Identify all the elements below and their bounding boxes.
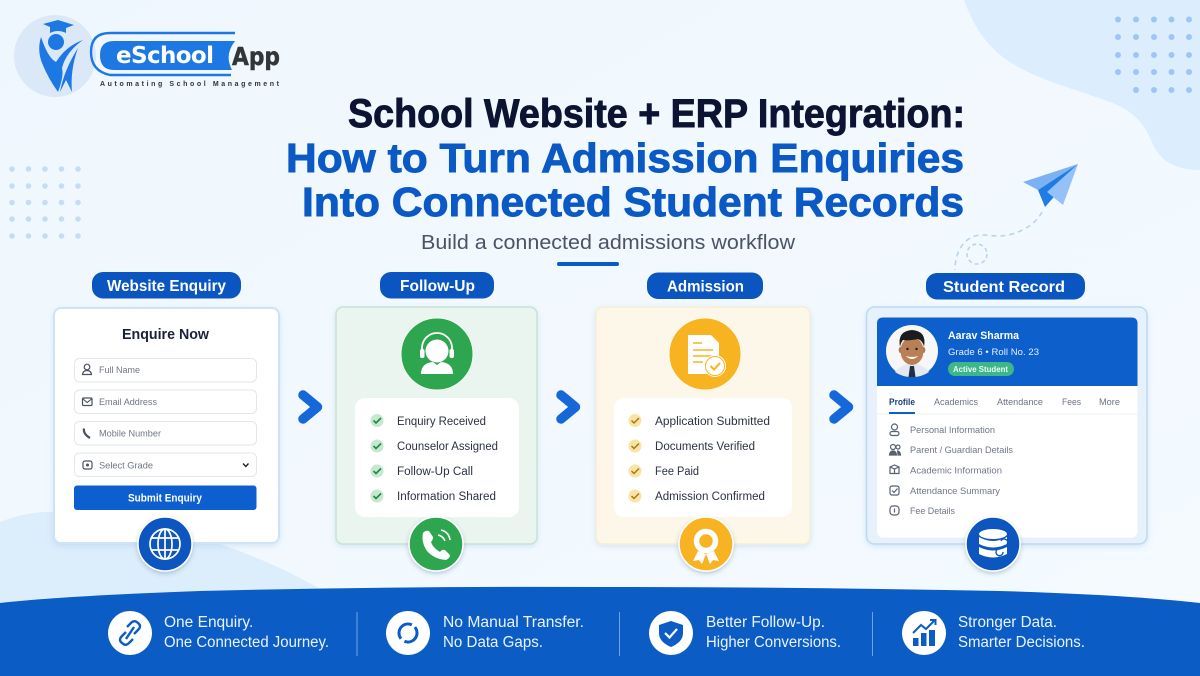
checklist: admission: Application Submitted [655, 416, 770, 428]
checklist: follow-up: Follow-Up Call [397, 466, 473, 478]
arrow 1 [303, 395, 318, 419]
step 4 pill: Student Record: Student Record [943, 279, 1065, 296]
footer band [0, 587, 1200, 676]
title: Into Connected Student Records [302, 179, 964, 225]
profile header: Grade 6 • Roll No. 23 [948, 347, 1039, 358]
benefit: stronger data: Smarter Decisions. [958, 634, 1085, 651]
benefit: connected journey: One Connected Journey. [164, 634, 329, 651]
field: full name [74, 358, 256, 382]
arrow 3 [834, 395, 848, 419]
checklist: follow-up [355, 398, 519, 517]
tabs [877, 397, 1138, 414]
step 3 pill: Admission: Admission [667, 278, 744, 296]
record list: Attendance Summary [910, 486, 1000, 497]
benefit: better follow-up: Better Follow-Up. [706, 614, 825, 631]
title [286, 92, 965, 225]
checklist: follow-up: Enquiry Received [397, 416, 486, 428]
icon: globe [138, 517, 192, 571]
checklist: follow-up: Information Shared [397, 491, 496, 503]
record list: Fee Details [910, 506, 955, 517]
field: full name: Full Name [99, 365, 140, 376]
title: How to Turn Admission Enquiries [286, 135, 964, 181]
field: email address: Email Address [99, 397, 157, 408]
checklist: admission: Documents Verified [655, 441, 755, 453]
tabs: Profile [889, 397, 915, 408]
status badge: Active Student [953, 364, 1008, 374]
benefit: connected journey [108, 611, 329, 655]
form heading: Enquire Now [122, 326, 209, 343]
panel: admission [596, 307, 810, 544]
subtitle: Build a connected admissions workflow [421, 232, 796, 254]
benefit: stronger data: Stronger Data. [958, 614, 1057, 631]
icon: document [669, 318, 741, 390]
arrow 2 [561, 395, 576, 419]
benefit: connected journey: One Enquiry. [164, 614, 253, 631]
step 1 pill: Website Enquiry [92, 272, 241, 298]
subtitle underline [557, 262, 619, 266]
profile header [877, 318, 1138, 386]
benefit: better follow-up: Higher Conversions. [706, 634, 841, 651]
logo emblem [14, 15, 96, 97]
benefit: no manual transfer [386, 611, 584, 655]
record list: Personal Information [910, 425, 995, 436]
tabs: More [1099, 397, 1120, 408]
profile header: Aarav Sharma [948, 330, 1020, 342]
logo wordmark [91, 33, 280, 88]
record list: Parent / Guardian Details [910, 445, 1013, 456]
panel: follow-up [336, 307, 537, 544]
title: School Website + ERP Integration: [348, 92, 965, 136]
step 4 pill: Student Record [926, 273, 1085, 300]
tabs: Fees [1062, 397, 1081, 408]
benefit: no manual transfer: No Manual Transfer. [443, 614, 584, 631]
submit button: Submit Enquiry [128, 492, 203, 504]
benefit: stronger data [902, 611, 1085, 655]
icon: database [966, 517, 1020, 571]
checklist: admission [614, 398, 792, 517]
logo wordmark: App [232, 42, 280, 71]
field: select grade [74, 453, 256, 476]
step 2 pill: Follow-Up: Follow-Up [400, 278, 475, 295]
panel: student record [866, 307, 1147, 544]
checklist: follow-up: Counselor Assigned [397, 441, 498, 453]
tabs: Attendance [997, 397, 1043, 408]
status badge [948, 362, 1014, 376]
record list: Academic Information [910, 466, 1002, 476]
field: mobile number [74, 422, 256, 445]
submit button [74, 486, 256, 510]
icon: paper plane [955, 164, 1078, 270]
step 2 pill: Follow-Up [380, 272, 494, 298]
logo wordmark: eSchool [116, 43, 214, 69]
student avatar [886, 325, 938, 377]
icon: phone [409, 517, 463, 571]
icon: counselor [401, 318, 473, 390]
step 3 pill: Admission [647, 272, 763, 299]
checklist: admission: Fee Paid [655, 466, 699, 478]
logo: eSchool App [14, 15, 280, 97]
benefit: better follow-up [649, 611, 841, 655]
tabs: Academics [934, 397, 978, 408]
field: email address [74, 390, 256, 414]
logo wordmark: Automating School Management [100, 81, 280, 88]
benefit: no manual transfer: No Data Gaps. [443, 634, 543, 651]
field: select grade: Select Grade [99, 460, 153, 472]
panel: website enquiry form [54, 308, 279, 543]
checklist: admission: Admission Confirmed [655, 491, 765, 503]
field: mobile number: Mobile Number [99, 428, 161, 440]
step 1 pill: Website Enquiry: Website Enquiry [107, 278, 226, 295]
record list [890, 424, 1013, 517]
icon: award rosette [679, 517, 733, 571]
